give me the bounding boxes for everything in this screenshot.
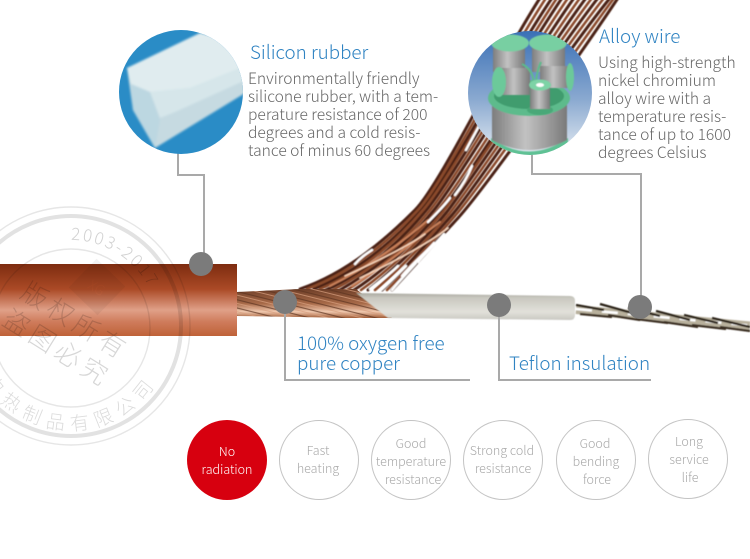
text: silicon rubber description: perature resistance of 200 [248, 103, 427, 125]
marker dot: copper [273, 290, 297, 314]
text: silicon rubber description: silicone rubber, with a tem- [248, 85, 438, 107]
copper strands fan [300, 0, 618, 290]
text: silicon rubber description [248, 67, 438, 161]
feature: no radiation [187, 420, 267, 500]
feature: long service life: life [682, 467, 699, 486]
feature: good bending force: Good [580, 433, 610, 452]
watermark stamp: XG [84, 275, 109, 301]
icon: alloy wire spools photo [468, 31, 592, 159]
label: teflon: Teflon insulation [509, 349, 650, 376]
watermark stamp: 2003-2017 [72, 228, 158, 282]
left side spool [492, 64, 534, 97]
text: alloy wire description: nickel chromium [598, 69, 716, 91]
text: alloy wire description: degrees Celsius [598, 141, 706, 163]
text: alloy wire description: tance of up to 1600 [598, 123, 731, 145]
marker dot: teflon [487, 293, 511, 317]
leader line: silicon rubber [178, 150, 204, 254]
right side spool [536, 62, 574, 91]
feature: good temperature resistance: Good [396, 433, 426, 452]
feature: good bending force [556, 420, 636, 500]
feature: good temperature resistance: temperature [376, 451, 446, 470]
feature: long service life: Long [675, 431, 703, 450]
text: alloy wire description [598, 51, 736, 163]
feature: fast heating [280, 420, 358, 500]
text: alloy wire description: temperature resis- [598, 105, 726, 127]
center spool [527, 80, 553, 115]
heading: alloy wire: Alloy wire [599, 22, 680, 49]
leader line: alloy wire [532, 150, 641, 297]
feature: fast heating: heating [297, 458, 339, 477]
watermark stamp: 盗图必究 [0, 299, 120, 395]
top-right spool [529, 34, 567, 72]
feature: fast heating: Fast [307, 440, 330, 459]
silicone sleeve [0, 264, 237, 336]
feature: good temperature resistance [372, 420, 450, 500]
feature: good bending force: bending [573, 451, 620, 470]
watermark stamp [0, 206, 190, 446]
leader line: teflon [499, 315, 651, 380]
feature: strong cold resistance [464, 420, 542, 500]
icon: silicone rubber block photo [119, 30, 250, 154]
label: copper: 100% oxygen free [297, 329, 445, 356]
text: silicon rubber description: tance of minus 60 degrees [248, 139, 430, 161]
label: copper [297, 329, 445, 376]
label: copper: pure copper [297, 349, 400, 376]
text: silicon rubber description: Environmentally friendly [248, 67, 420, 89]
feature: strong cold resistance: resistance [475, 458, 531, 477]
text: alloy wire description: Using high-strength [598, 51, 736, 73]
leader line: copper [285, 312, 470, 380]
copper braid [237, 289, 392, 318]
feature: strong cold resistance: Strong cold [470, 440, 534, 459]
text: silicon rubber description: degrees and a cold resis- [248, 121, 420, 143]
big spool [488, 80, 570, 159]
top-left spool [491, 34, 529, 72]
text: alloy wire description: alloy wire with a [598, 87, 711, 109]
marker dot: alloy [628, 295, 652, 319]
marker dot: sleeve [189, 252, 213, 276]
feature: no radiation: radiation [202, 459, 252, 478]
feature: good temperature resistance: resistance [385, 469, 441, 488]
bare alloy wire [576, 304, 750, 331]
feature: long service life: service [669, 449, 709, 468]
feature: long service life [648, 420, 728, 498]
teflon insulation [356, 293, 575, 320]
heading: silicon rubber: Silicon rubber [250, 38, 369, 65]
watermark stamp: 版权所有 [14, 272, 138, 368]
feature: no radiation: No [219, 441, 235, 460]
feature: good bending force: force [583, 469, 611, 488]
